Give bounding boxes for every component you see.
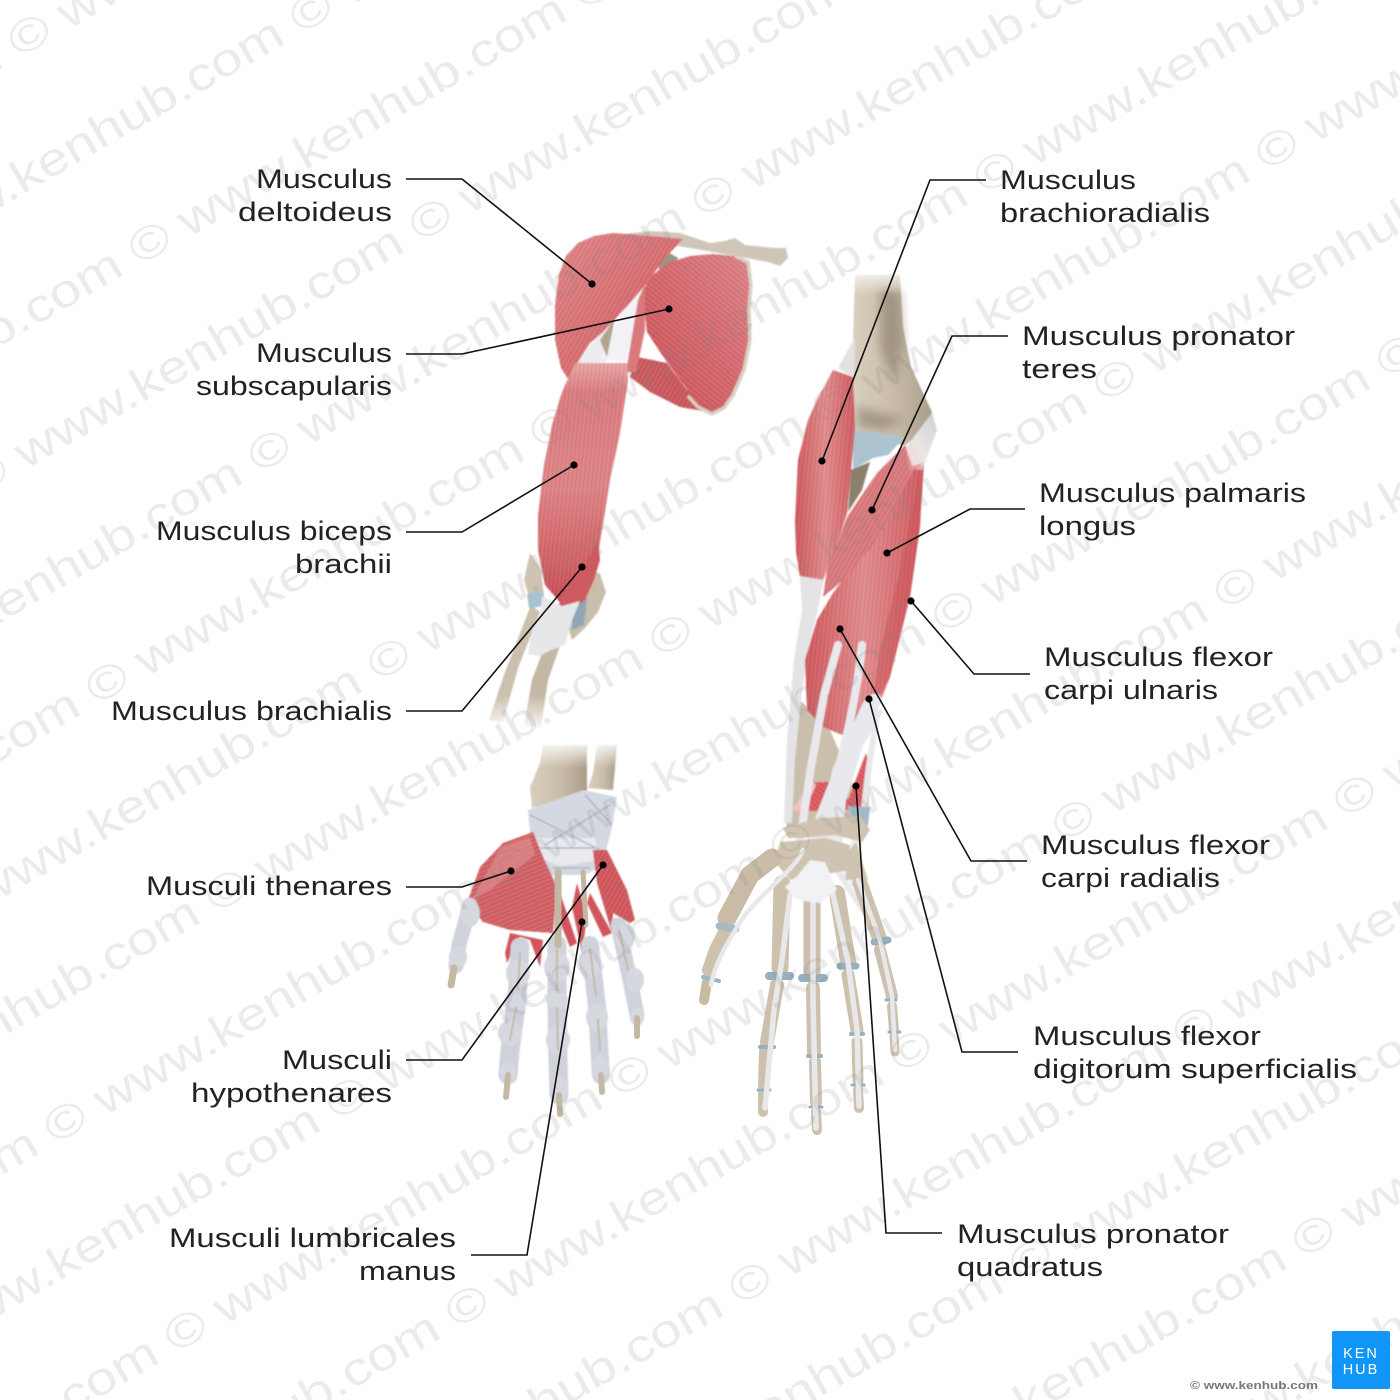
label: flexor carpi ulnaris: carpi ulnaris xyxy=(1044,675,1218,705)
logo: KENHUB: HUB xyxy=(1343,1362,1379,1378)
label: hypothenares xyxy=(191,1045,392,1108)
label: flexor carpi radialis: carpi radialis xyxy=(1041,863,1220,893)
label: biceps brachii: Musculus biceps xyxy=(156,516,392,546)
forearm radius behind tendons xyxy=(786,700,860,832)
deltoid xyxy=(555,233,683,382)
medial epicondyle common tendon xyxy=(906,413,937,470)
label: brachioradialis: Musculus xyxy=(1000,165,1136,195)
label: biceps brachii: brachii xyxy=(295,549,392,579)
elbow joint cartilage xyxy=(853,430,905,470)
lumbrical muscles xyxy=(505,883,612,967)
label: brachioradialis xyxy=(1000,165,1210,228)
label: pronator quadratus: Musculus pronator xyxy=(957,1219,1229,1249)
label: subscapularis xyxy=(196,338,392,401)
leader: flexor carpi radialis xyxy=(836,625,1027,861)
labels xyxy=(111,164,1357,1286)
label: lumbricales manus: manus xyxy=(359,1256,456,1286)
label: subscapularis: subscapularis xyxy=(196,371,392,401)
label: lumbricales manus: Musculi lumbricales xyxy=(169,1223,456,1253)
label: brachioradialis: brachioradialis xyxy=(1000,198,1210,228)
leader: palmaris longus xyxy=(883,509,1025,557)
leader: flexor digitorum superficialis xyxy=(865,695,1018,1052)
label: hypothenares: Musculi xyxy=(282,1045,392,1075)
label: lumbricales manus xyxy=(169,1223,456,1286)
label: pronator teres: teres xyxy=(1022,354,1097,384)
label: biceps brachii xyxy=(156,516,392,579)
brachioradialis xyxy=(795,338,855,580)
label: brachialis: Musculus brachialis xyxy=(111,696,392,726)
finger bones xyxy=(763,883,895,1130)
leader: lumbricals xyxy=(471,918,586,1255)
finger flexor tendons xyxy=(711,850,895,1128)
leader: hypothenar xyxy=(406,861,607,1060)
label: flexor digitorum superficialis: digitorum superficialis xyxy=(1033,1054,1357,1084)
label: subscapularis: Musculus xyxy=(256,338,392,368)
finger bones and tips xyxy=(451,930,637,1114)
label: pronator quadratus: quadratus xyxy=(957,1252,1103,1282)
label: pronator teres: Musculus pronator xyxy=(1022,321,1295,351)
palmar aponeurosis xyxy=(785,860,837,903)
humerus head under acromion xyxy=(657,252,678,272)
carpal bones xyxy=(775,816,870,880)
label: pronator teres xyxy=(1022,321,1295,384)
thenar muscles xyxy=(467,832,557,933)
label: palmaris longus: longus xyxy=(1039,511,1136,541)
biceps distal tendon xyxy=(528,596,580,656)
forearm bones below the elbow xyxy=(480,553,606,731)
teres major xyxy=(630,357,714,413)
leader lines and anchor dots xyxy=(406,179,1030,1255)
radius and ulna at wrist xyxy=(530,740,625,808)
clavicle xyxy=(617,231,788,266)
label: flexor digitorum superficialis xyxy=(1033,1021,1357,1084)
leader: pronator teres xyxy=(868,336,1008,514)
leader: biceps brachii xyxy=(406,461,578,532)
logo: KENHUB xyxy=(1332,1331,1390,1389)
leader: flexor carpi ulnaris xyxy=(907,597,1030,674)
blue wrist cartilage xyxy=(847,806,870,826)
pronator quadratus xyxy=(792,753,871,812)
illustration: forearm muscles xyxy=(784,265,937,910)
leader: pronator quadratus xyxy=(852,782,942,1233)
pronator teres xyxy=(823,445,914,597)
illustration: shoulder and upper arm muscles xyxy=(480,231,788,731)
label: flexor carpi ulnaris: Musculus flexor xyxy=(1044,642,1273,672)
leader: thenar xyxy=(406,867,515,887)
hypothenar muscles xyxy=(593,850,635,933)
humerus xyxy=(845,265,932,445)
leader: brachialis xyxy=(406,563,586,711)
label: flexor carpi radialis: Musculus flexor xyxy=(1041,830,1270,860)
illustration: palmar skeleton and tendons of the hand xyxy=(703,816,900,1130)
label: palmaris longus xyxy=(1039,478,1306,541)
label: flexor digitorum superficialis: Musculus flexor xyxy=(1033,1021,1261,1051)
illustration: deep muscles of the hand xyxy=(449,740,644,1114)
label: palmaris longus: Musculus palmaris xyxy=(1039,478,1306,508)
label: deltoideus xyxy=(238,164,392,227)
label: thenares: Musculi thenares xyxy=(146,871,392,901)
brachioradialis tendon xyxy=(784,576,824,823)
thumb bones xyxy=(703,858,772,1000)
tendons of biceps in the shoulder xyxy=(576,282,646,372)
copyright: © www.kenhub.com xyxy=(1190,1380,1318,1392)
label: deltoideus: deltoideus xyxy=(238,197,392,227)
label: pronator quadratus xyxy=(957,1219,1229,1282)
biceps brachii xyxy=(538,363,628,606)
label: flexor carpi radialis xyxy=(1041,830,1270,893)
leader: deltoid xyxy=(406,179,596,288)
label: hypothenares: hypothenares xyxy=(191,1078,392,1108)
fingers with fibrous sheaths xyxy=(449,899,644,1100)
label: deltoideus: Musculus xyxy=(256,164,392,194)
carpal ligaments xyxy=(528,790,617,875)
subscapularis xyxy=(643,254,751,414)
joint cartilage xyxy=(758,940,900,1107)
leader: brachioradialis xyxy=(818,180,986,465)
metacarpal bones xyxy=(558,872,586,945)
leader: subscapularis xyxy=(406,305,673,354)
brachialis xyxy=(556,540,600,610)
forearm flexor tendons xyxy=(800,645,880,910)
logo: KENHUB: KEN xyxy=(1343,1346,1379,1362)
flexor digitorum and palmaris mass xyxy=(805,462,924,737)
label: flexor carpi ulnaris xyxy=(1044,642,1273,705)
